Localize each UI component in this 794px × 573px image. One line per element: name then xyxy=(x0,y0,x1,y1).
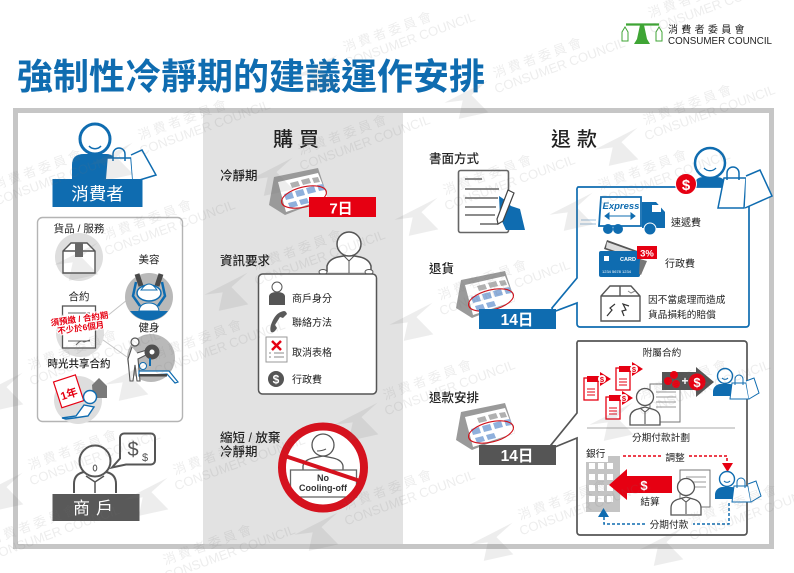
goods label: 貨品 / 服務 xyxy=(54,222,105,235)
badge: 14 days grey: 14日 xyxy=(501,448,533,465)
watermark pattern: 消費者委員會 xyxy=(381,356,476,403)
title: 強制性冷靜期的建議運作安排 xyxy=(17,56,485,97)
icon: credit card with 3%: 1234 5678 1234 xyxy=(602,269,632,274)
icon: merchant identity xyxy=(269,282,285,305)
text: damage compensation xyxy=(648,293,726,321)
panel: refund xyxy=(429,128,772,535)
icon: calendar 7 days xyxy=(269,168,329,215)
icon: admin fee dollar: $ xyxy=(273,372,280,386)
watermark pattern: 消費者委員會 xyxy=(441,151,536,198)
arrow: charges to consumer: + xyxy=(681,374,689,388)
arrow: instalment payments blue dotted xyxy=(598,503,729,531)
icon: consumer instalment xyxy=(715,472,761,502)
text: linked contract: 附屬合約 xyxy=(643,346,681,359)
icon: no cooling-off prohibition sign: No xyxy=(317,473,329,483)
text: admin fee: 行政費 xyxy=(292,373,322,386)
icon: merchant with speech bubble: $ xyxy=(142,452,148,464)
watermark pattern: CONSUMER COUNCIL xyxy=(642,82,777,143)
watermark pattern: 消費者委員會 xyxy=(516,476,611,523)
icon: consumer linked contract xyxy=(713,368,759,399)
icon: merchant with speech bubble xyxy=(74,434,155,493)
watermark pattern: 消費者委員會 xyxy=(686,481,781,528)
badge: 14 days grey xyxy=(479,445,556,465)
icon: contract with red note: 不少於6個月 xyxy=(57,320,105,336)
arrow: charges to consumer: $ xyxy=(693,375,701,390)
information requirement label: 資訊要求 xyxy=(220,253,271,268)
icon: merchant with contract xyxy=(630,384,680,425)
watermark pattern: 消費者委員會 xyxy=(136,96,231,143)
icon: contract with red note xyxy=(50,306,110,357)
written form label: 書面方式 xyxy=(429,151,480,166)
icon: written document with hand xyxy=(458,170,525,232)
icon: calendar return xyxy=(456,271,516,318)
heading: refund: 退款 xyxy=(551,128,603,151)
text: contact method: 聯絡方法 xyxy=(292,316,332,329)
watermark pattern: CONSUMER COUNCIL xyxy=(152,317,287,378)
watermark pattern: CONSUMER COUNCIL xyxy=(137,97,272,158)
fitness label: 健身 xyxy=(138,321,160,334)
watermark pattern: CONSUMER COUNCIL xyxy=(517,477,652,538)
icon: timeshare contract: 1年 xyxy=(59,385,79,403)
icon: contract with red note: 須預繳 / 合約期 xyxy=(50,310,109,328)
watermark pattern: CONSUMER COUNCIL xyxy=(437,257,572,318)
watermark pattern: 消費者委員會 xyxy=(436,256,531,303)
icon: bank building xyxy=(586,456,620,512)
watermark pattern: 消費者委員會 xyxy=(151,316,246,363)
watermark pattern: CONSUMER COUNCIL xyxy=(252,227,387,288)
watermark pattern: CONSUMER COUNCIL xyxy=(102,197,237,258)
watermark pattern: 消費者委員會 xyxy=(251,226,346,273)
icon: no cooling-off prohibition sign xyxy=(282,426,364,508)
refund arrangement label: 退款安排 xyxy=(429,390,480,405)
arrow: charges to consumer xyxy=(662,367,714,397)
icon: credit card with 3% xyxy=(599,240,657,277)
text: delivery fee: 速遞費 xyxy=(671,216,701,229)
watermark pattern: 消費者委員會 xyxy=(596,146,691,193)
panel: purchase column background xyxy=(203,113,403,544)
timeshare label: 時光共享合約 xyxy=(48,357,110,370)
text: merchant identity: 商戶身分 xyxy=(292,292,332,305)
watermark pattern: 消費者委員會 xyxy=(26,326,121,373)
icon: damaged box xyxy=(601,286,640,321)
watermark pattern: 消費者委員會 xyxy=(296,111,391,158)
icon: cancellation form xyxy=(266,337,287,362)
badge: 7 days: 7日 xyxy=(329,200,353,218)
badge: 14 days blue: 14日 xyxy=(501,312,533,329)
watermark pattern: CONSUMER COUNCIL xyxy=(27,427,162,488)
icon: credit card with 3%: 3% xyxy=(640,248,654,260)
arrow: adjustment red dotted xyxy=(623,451,733,472)
watermark pattern: CONSUMER COUNCIL xyxy=(342,9,477,70)
panel: goods and contracts card xyxy=(38,218,182,424)
logo: Consumer Council: CONSUMER COUNCIL xyxy=(668,35,772,47)
icon: merchant behind card xyxy=(319,232,373,274)
icon: goods box xyxy=(55,233,103,281)
icon: beauty treatment xyxy=(125,273,173,321)
waive cooling-off label xyxy=(220,430,280,459)
cooling-off label: 冷靜期 xyxy=(220,168,258,183)
watermark pattern: CONSUMER COUNCIL xyxy=(172,432,307,493)
watermark pattern: CONSUMER COUNCIL xyxy=(637,357,772,418)
consumer label xyxy=(52,179,142,207)
watermark pattern: 消費者委員會 xyxy=(636,356,731,403)
icon: credit card with 3%: CARD xyxy=(620,257,636,263)
logo: Consumer Council: 消費者委員會 xyxy=(668,23,748,36)
panel: main frame xyxy=(16,110,772,546)
text: admin fee: 行政費 xyxy=(665,257,695,270)
watermark pattern: CONSUMER COUNCIL xyxy=(442,152,577,213)
panel: refund arrangement callout xyxy=(551,341,761,535)
panel: parties xyxy=(38,124,182,521)
watermark pattern: 消費者委員會 xyxy=(171,431,266,478)
text: damage compensation: 貨品損耗的賠償 xyxy=(648,308,716,321)
logo: Consumer Council xyxy=(622,23,772,47)
panel: purchase xyxy=(220,128,376,508)
beauty label: 美容 xyxy=(138,253,160,266)
icon: no cooling-off prohibition sign: Cooling-off xyxy=(299,483,348,493)
icon: fitness training xyxy=(127,334,178,383)
divider xyxy=(587,427,735,429)
waive cooling-off label: 冷靜期 xyxy=(220,444,258,459)
badge: 7 days xyxy=(309,197,376,218)
text: damage compensation: 因不當處理而造成 xyxy=(648,293,726,306)
panel: information card xyxy=(258,274,376,394)
icon: express truck xyxy=(580,197,665,235)
icon: consumer paying with bags xyxy=(676,148,772,208)
merchant label xyxy=(52,494,140,521)
arrow: adjustment red dotted: 調整 xyxy=(665,451,685,464)
text: cancellation form: 取消表格 xyxy=(292,346,332,359)
watermark pattern: 消費者委員會 xyxy=(641,81,736,128)
watermark pattern: 消費者委員會 xyxy=(341,8,436,55)
waive cooling-off label: 縮短 / 放棄 xyxy=(220,430,280,445)
watermark pattern: 消費者委員會 xyxy=(491,34,586,81)
watermark pattern: CONSUMER COUNCIL xyxy=(342,467,477,528)
consumer label: 消費者 xyxy=(71,184,124,204)
panel: refund costs callout xyxy=(552,187,749,327)
arrow: settlement to bank: 結算 xyxy=(640,495,660,508)
arrow: instalment payments blue dotted: 分期付款 xyxy=(650,518,689,531)
icon: merchant with speech bubble: $ xyxy=(127,439,139,461)
watermark pattern: 消費者委員會 xyxy=(26,426,121,473)
merchant label: 商戶 xyxy=(73,499,119,518)
icon: timeshare contract xyxy=(54,375,107,424)
text: bank: 銀行 xyxy=(586,447,606,460)
icon: consumer with shopping bags xyxy=(72,124,156,182)
watermark pattern: CONSUMER COUNCIL xyxy=(297,112,432,173)
icons: linked contract documents xyxy=(584,362,643,419)
watermark pattern: 消費者委員會 xyxy=(341,466,436,513)
icon: merchant instalment xyxy=(671,470,710,515)
contract label: 合約 xyxy=(68,290,90,303)
arrow: settlement to bank xyxy=(609,469,672,508)
badge: 14 days blue xyxy=(479,309,556,329)
watermark pattern: CONSUMER COUNCIL xyxy=(382,357,517,418)
text: instalment plan: 分期付款計劃 xyxy=(632,431,690,444)
icon: express truck: Express xyxy=(603,201,639,212)
icon: consumer paying with bags: $ xyxy=(682,177,691,194)
watermark pattern: 消費者委員會 xyxy=(161,521,256,568)
watermark pattern: CONSUMER COUNCIL xyxy=(597,147,732,208)
return goods label: 退貨 xyxy=(429,261,454,276)
arrow: settlement to bank: $ xyxy=(640,478,648,493)
icon: phone xyxy=(270,311,287,332)
icon: calendar refund xyxy=(456,403,516,450)
watermark pattern: CONSUMER COUNCIL xyxy=(492,35,627,96)
watermark pattern: CONSUMER COUNCIL xyxy=(27,327,162,388)
watermark pattern: 消費者委員會 xyxy=(101,196,196,243)
heading: purchase: 購買 xyxy=(273,128,325,151)
